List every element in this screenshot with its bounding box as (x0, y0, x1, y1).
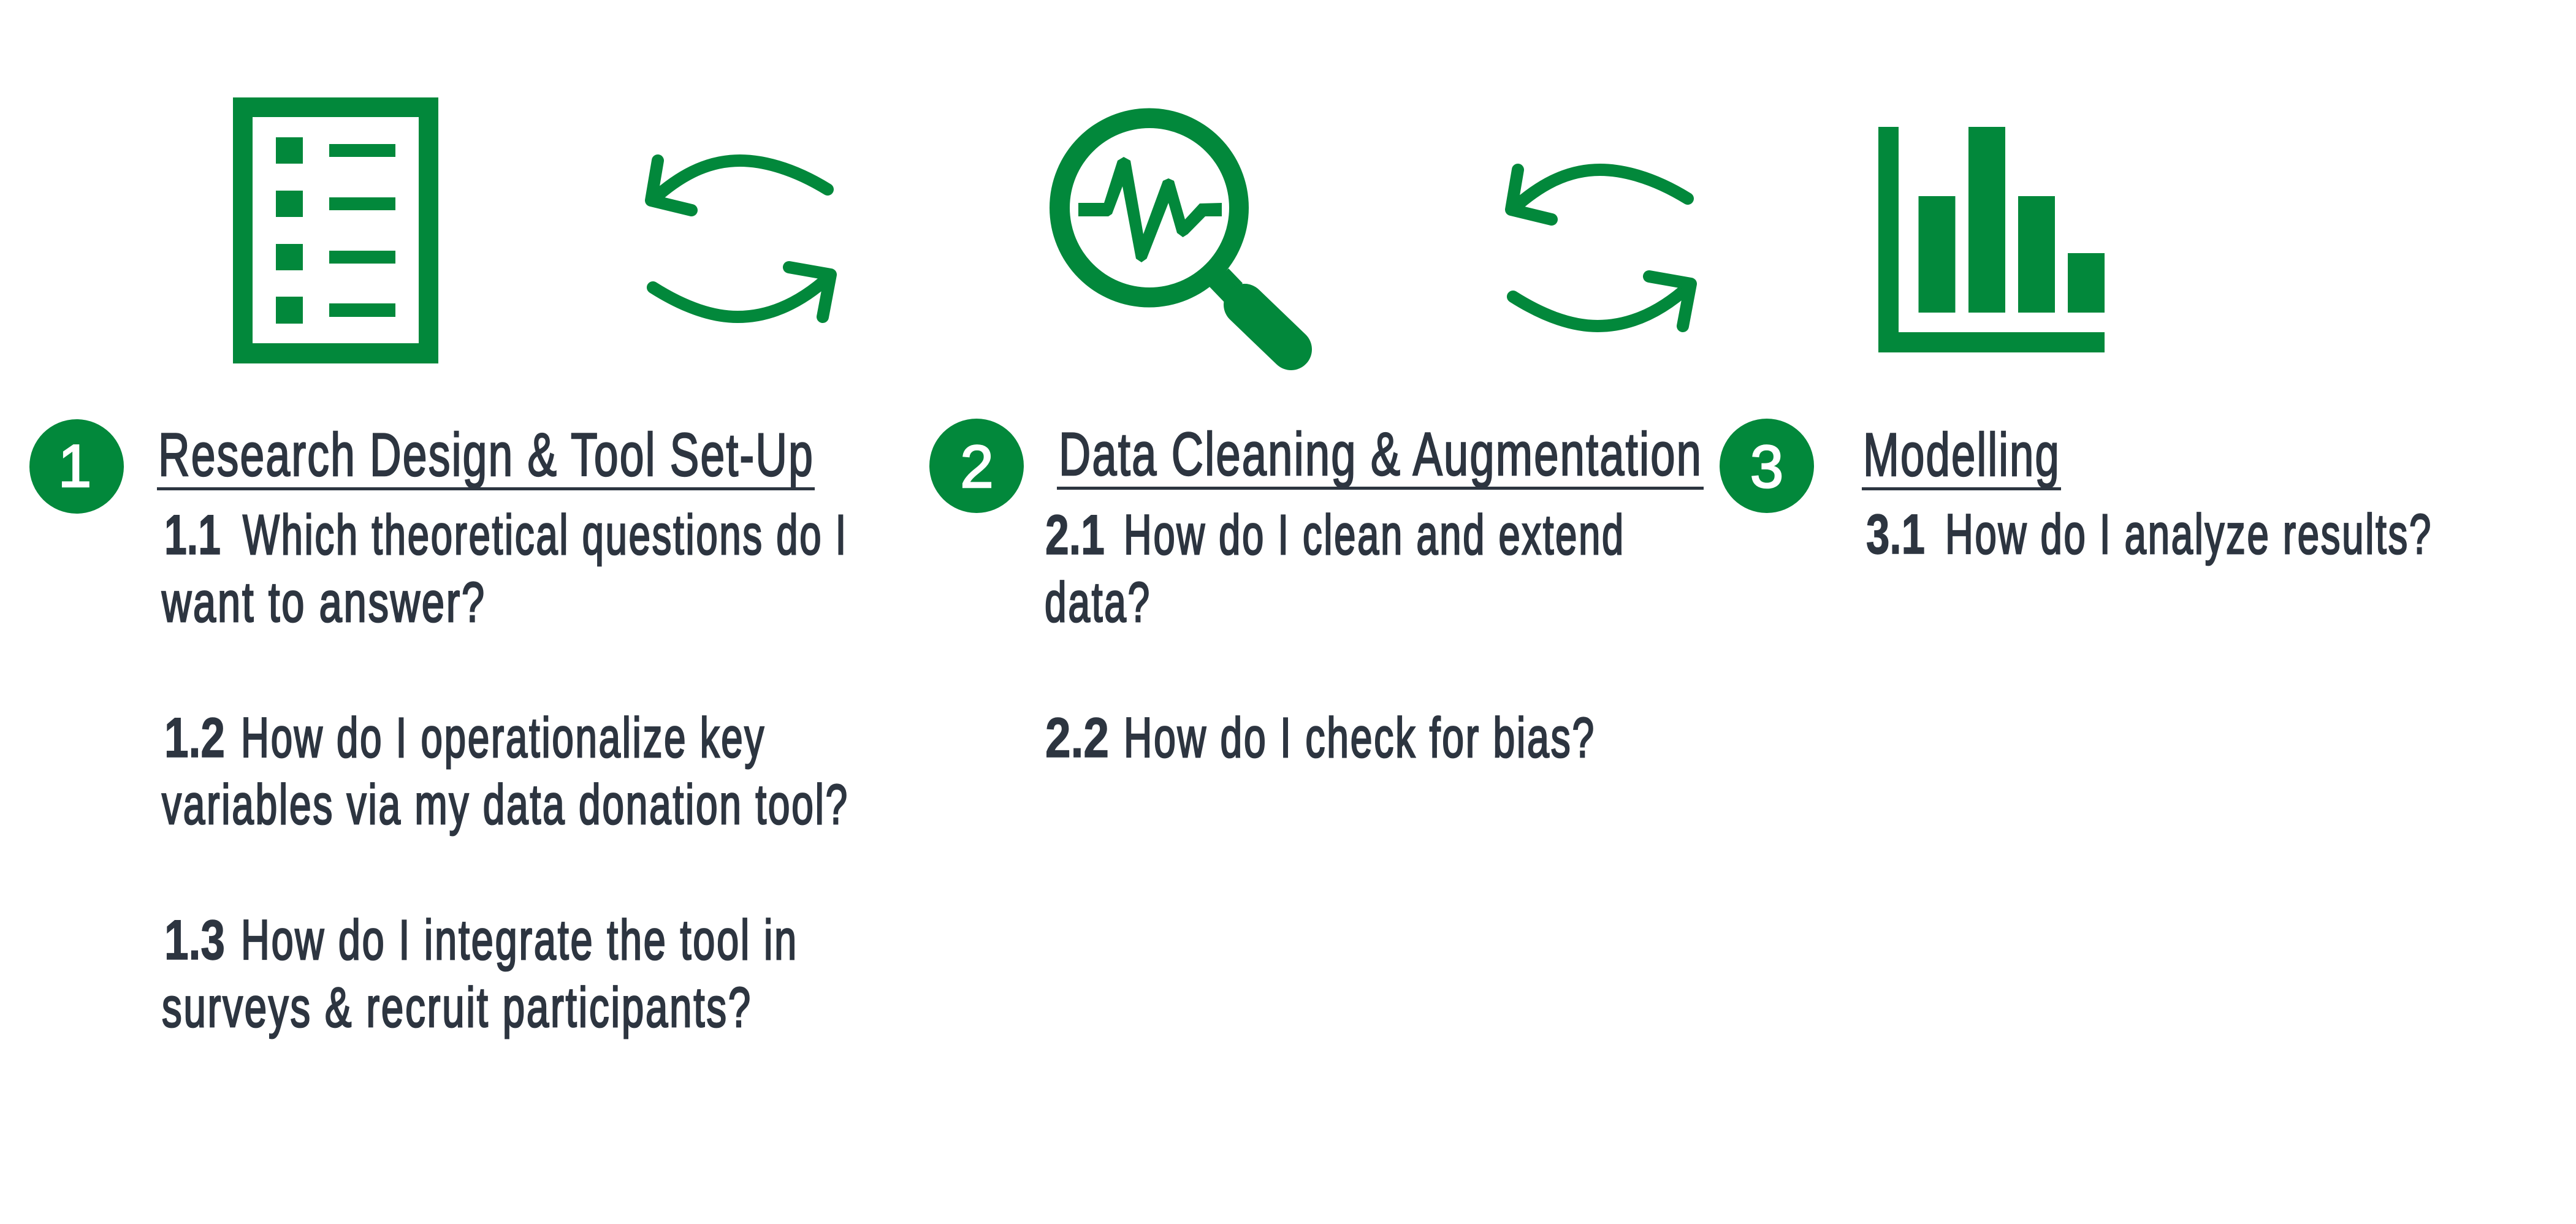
panel: step 1 research design (29, 419, 849, 1039)
question 1.3 (162, 909, 798, 1039)
question 2.2: 2.2 (1045, 707, 1109, 769)
arrow: iterate between step 1 and step 2 (651, 161, 831, 317)
heading: modelling (1862, 420, 2061, 490)
panel: step 2 data cleaning (929, 419, 1704, 769)
question 1.2: 1.2 (164, 707, 225, 769)
question 2.1: 2.1 (1045, 504, 1105, 566)
icon: checklist document (233, 97, 438, 363)
question 1.1: 1.1 (164, 504, 221, 566)
question 1.3: 1.3 (164, 909, 225, 971)
step number badge 1 (29, 419, 124, 514)
question 3.1: 3.1 (1866, 503, 1925, 566)
step number badge 2 (929, 419, 1024, 513)
question 1.1: Which theoretical questions do I (243, 504, 848, 566)
question 1.2: variables via my data donation tool? (162, 774, 849, 836)
question 3.1 (1866, 503, 2433, 566)
heading: research design: Research Design & Tool Set-Up (158, 420, 814, 488)
question 1.2 (162, 707, 849, 836)
question 1.1: want to answer? (161, 571, 486, 634)
question 2.1: data? (1045, 571, 1151, 634)
question 1.2: How do I operationalize key (241, 707, 766, 769)
arrow: iterate between step 2 and step 3 (1511, 170, 1691, 326)
panel: step 3 modelling (1720, 419, 2433, 566)
step number badge 3 (1720, 419, 1814, 513)
step number badge 2: 2 (960, 433, 994, 500)
icon: magnifying glass with pulse line (1050, 108, 1291, 349)
step number badge 1: 1 (58, 432, 91, 500)
question 2.2 (1045, 707, 1596, 769)
icon: bar chart (1878, 127, 2105, 352)
heading: modelling: Modelling (1863, 420, 2060, 488)
question 2.2: How do I check for bias? (1124, 707, 1596, 769)
question 2.1: How do I clean and extend (1124, 504, 1625, 566)
step number badge 3: 3 (1750, 433, 1783, 500)
question 1.3: How do I integrate the tool in (241, 909, 798, 971)
heading: data cleaning: Data Cleaning & Augmentation (1059, 420, 1702, 488)
question 1.3: surveys & recruit participants? (162, 976, 752, 1039)
question 1.1 (161, 504, 848, 634)
question 2.1 (1045, 504, 1625, 634)
